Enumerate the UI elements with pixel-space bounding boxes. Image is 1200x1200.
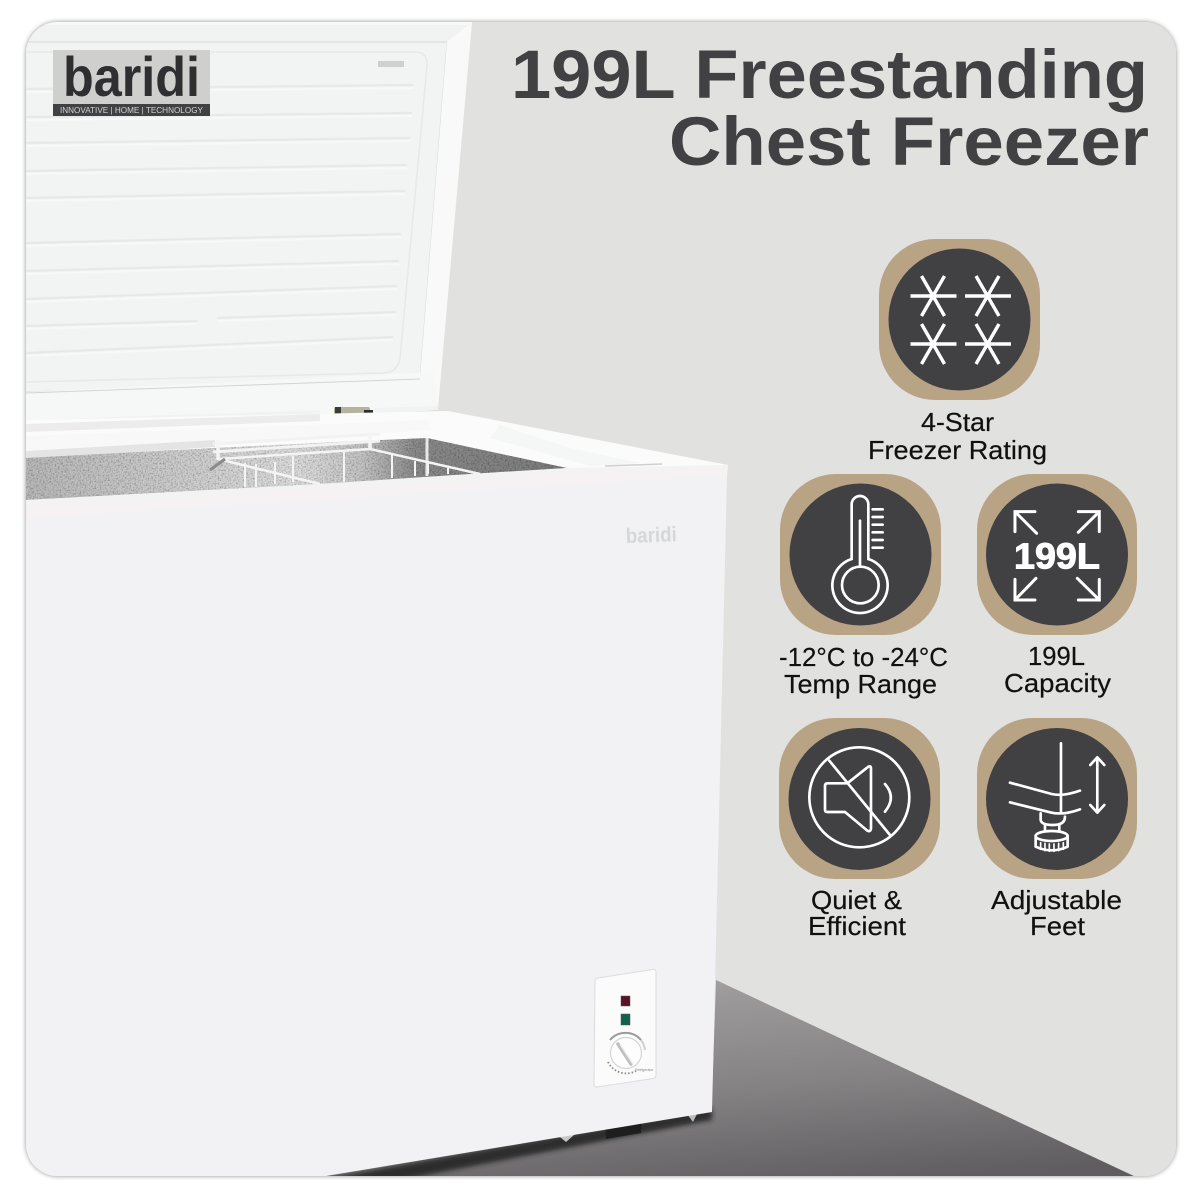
feature: capacity bbox=[977, 474, 1137, 698]
floor bbox=[300, 980, 1136, 1177]
title bbox=[511, 36, 1149, 180]
feature: quiet and efficient bbox=[779, 718, 940, 941]
freezer hinge bbox=[334, 407, 373, 414]
label: 4-Star bbox=[921, 407, 994, 437]
freezer lid bbox=[26, 22, 472, 436]
label: 199L bbox=[1028, 641, 1085, 671]
feature: temperature range bbox=[779, 474, 948, 699]
logo: INNOVATIVE | HOME | TECHNOLOGY bbox=[60, 106, 204, 115]
control panel: Refrigerator bbox=[635, 1068, 654, 1072]
icon: thermometer bbox=[780, 474, 941, 635]
label bbox=[991, 885, 1122, 941]
wire basket bbox=[210, 432, 480, 487]
icon: expanding arrows with 199L bbox=[977, 474, 1137, 635]
logo: baridi bbox=[63, 45, 200, 108]
label: Efficient bbox=[808, 911, 907, 941]
label: Feet bbox=[1030, 911, 1086, 941]
icon: adjustable foot bbox=[977, 718, 1137, 879]
label: Quiet & bbox=[811, 885, 902, 915]
freezer front body bbox=[26, 465, 728, 1178]
label: Capacity bbox=[1004, 668, 1111, 698]
brand mark on freezer: baridi bbox=[625, 523, 677, 548]
label bbox=[1004, 641, 1111, 698]
label bbox=[868, 407, 1047, 465]
feature: 4-star freezer rating bbox=[868, 239, 1047, 465]
label bbox=[779, 642, 948, 699]
freezer rim and interior bbox=[26, 411, 728, 507]
icon: muted speaker bbox=[779, 718, 940, 879]
title: Chest Freezer bbox=[669, 103, 1149, 180]
label: -12°C to -24°C bbox=[779, 642, 948, 672]
title: 199L Freestanding bbox=[511, 36, 1148, 113]
icon: expanding arrows with 199L: 199L bbox=[1014, 535, 1100, 576]
freezer shadow and feet bbox=[320, 1108, 712, 1180]
icon: four stars bbox=[879, 239, 1040, 400]
label bbox=[808, 885, 907, 941]
label: Temp Range bbox=[784, 669, 937, 699]
control panel bbox=[594, 969, 656, 1087]
label: Adjustable bbox=[991, 885, 1122, 915]
label: Freezer Rating bbox=[868, 435, 1047, 465]
feature: adjustable feet bbox=[977, 718, 1137, 941]
